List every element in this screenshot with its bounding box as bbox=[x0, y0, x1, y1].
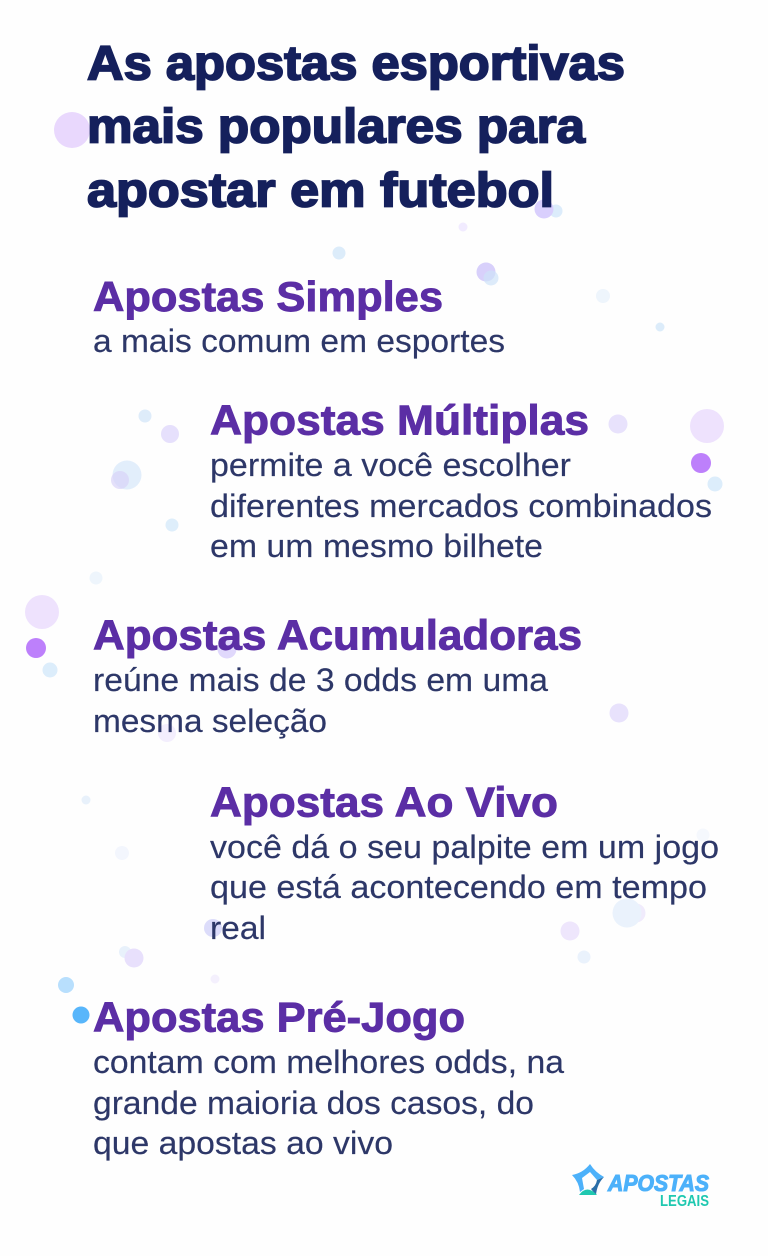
logo wordmark: LEGAIS bbox=[660, 1193, 709, 1210]
section: Apostas Simples bbox=[93, 273, 505, 359]
section: Apostas Pré-Jogo: grande maioria dos casos, do bbox=[93, 1085, 534, 1121]
logo: Apostas Legais bbox=[572, 1164, 709, 1210]
section: Apostas Ao Vivo: você dá o seu palpite em um jogo bbox=[210, 829, 719, 865]
section: Apostas Múltiplas bbox=[210, 396, 712, 564]
logo wordmark: APOSTAS bbox=[607, 1170, 709, 1196]
section: Apostas Ao Vivo: real bbox=[210, 910, 266, 946]
section: Apostas Pré-Jogo: contam com melhores odds, na bbox=[93, 1044, 564, 1080]
title: As apostas esportivas bbox=[87, 38, 625, 90]
section: Apostas Ao Vivo bbox=[210, 778, 719, 946]
section: Apostas Ao Vivo: que está acontecendo em tempo bbox=[210, 869, 707, 905]
section: Apostas Pré-Jogo: Apostas Pré-Jogo bbox=[93, 994, 465, 1040]
section: Apostas Acumuladoras: reúne mais de 3 odds em uma bbox=[93, 662, 548, 698]
icon: star bbox=[572, 1164, 604, 1195]
title bbox=[87, 38, 625, 218]
section: Apostas Simples: Apostas Simples bbox=[93, 273, 443, 320]
section: Apostas Ao Vivo: Apostas Ao Vivo bbox=[210, 778, 558, 826]
title: mais populares para bbox=[87, 100, 585, 154]
section: Apostas Múltiplas: em um mesmo bilhete bbox=[210, 528, 543, 564]
section: Apostas Acumuladoras: Apostas Acumuladoras bbox=[93, 612, 582, 658]
section: Apostas Múltiplas: permite a você escolher bbox=[210, 447, 571, 483]
section: Apostas Simples: a mais comum em esportes bbox=[93, 323, 505, 359]
title: apostar em futebol bbox=[87, 164, 554, 218]
section: Apostas Pré-Jogo: que apostas ao vivo bbox=[93, 1125, 393, 1161]
section: Apostas Acumuladoras: mesma seleção bbox=[93, 703, 327, 739]
section: Apostas Pré-Jogo bbox=[93, 994, 564, 1161]
section: Apostas Acumuladoras bbox=[93, 612, 582, 739]
decorative bubbles bbox=[25, 112, 724, 1024]
section: Apostas Múltiplas: Apostas Múltiplas bbox=[210, 396, 589, 444]
logo wordmark bbox=[607, 1170, 709, 1210]
section: Apostas Múltiplas: diferentes mercados combinados bbox=[210, 488, 712, 524]
